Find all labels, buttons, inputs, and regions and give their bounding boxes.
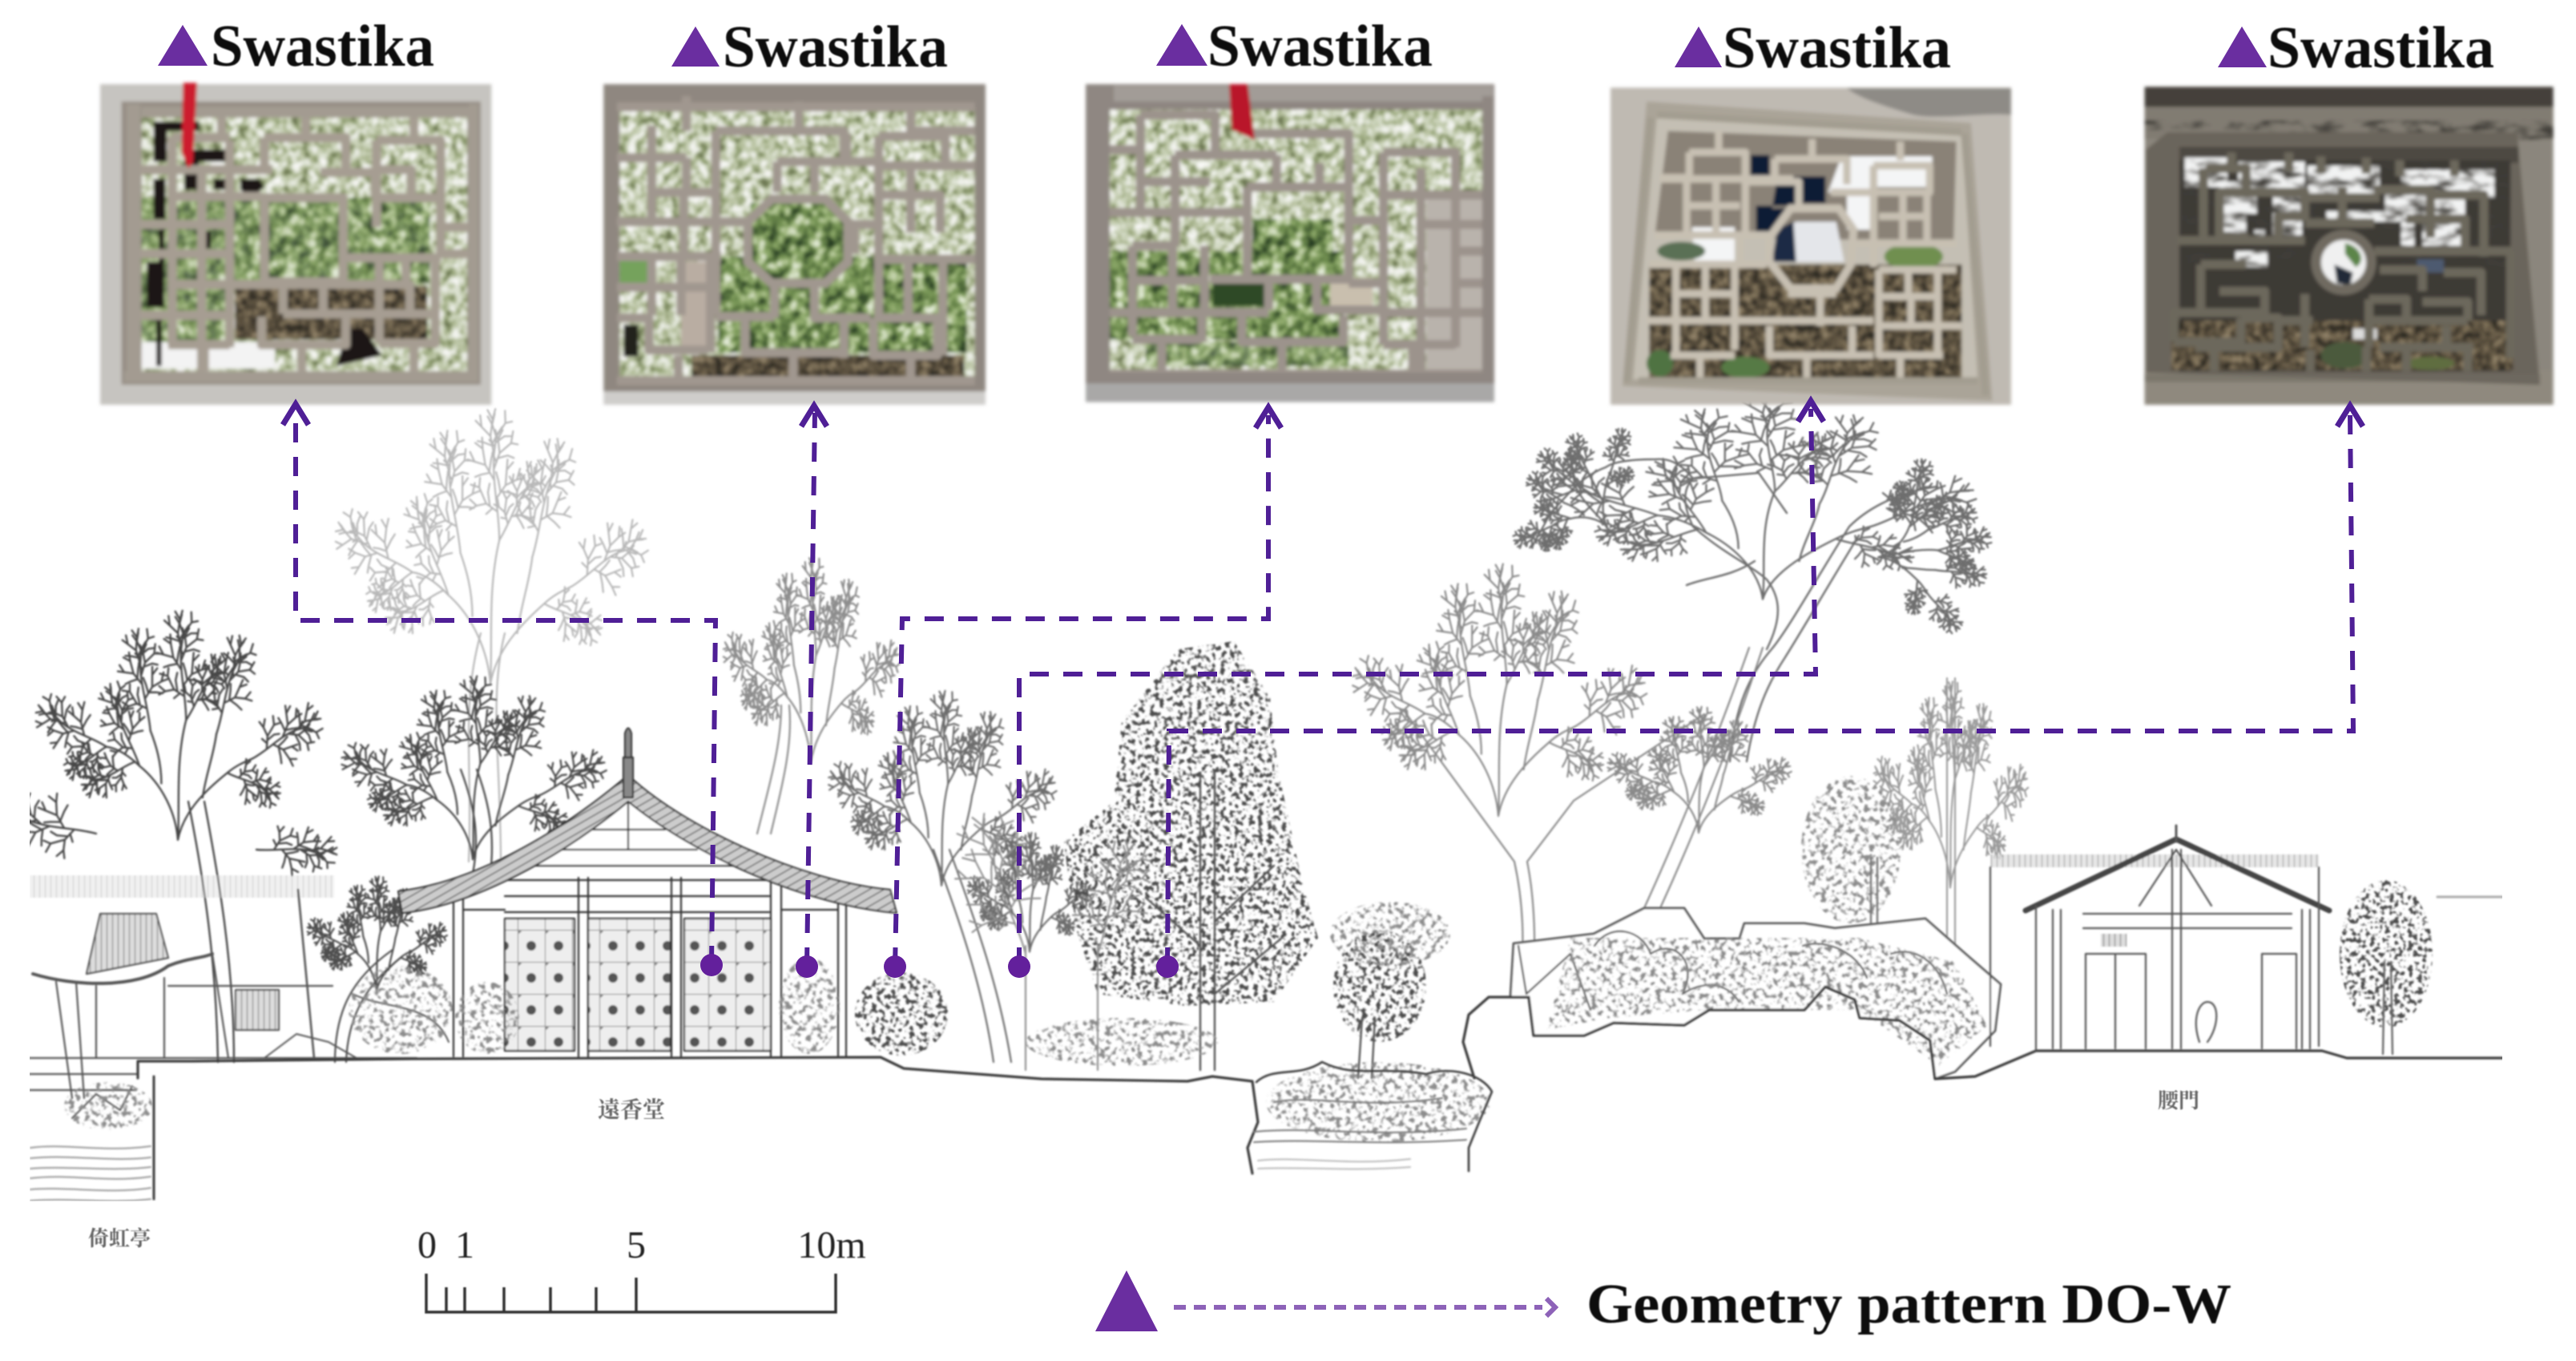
photo 1: lattice window [100, 83, 491, 405]
tree: dense conifer [1064, 641, 1318, 1070]
window 2 view [619, 107, 975, 379]
photo 5: dark lattice window [2145, 87, 2554, 405]
tree: faint tree above hall right [716, 550, 907, 834]
gate roof [2026, 839, 2329, 911]
scale label 5: 5 [627, 1224, 646, 1266]
window 3 view [1100, 110, 1485, 377]
window 4 wall stains [1847, 88, 2011, 117]
window 5 medallion [2316, 235, 2371, 290]
legend triangle [1095, 1270, 1158, 1331]
shrub: tree behind rockery [1800, 775, 1901, 925]
tree: small dark tree left of hall [301, 872, 453, 1062]
window 4 view [1647, 131, 1961, 379]
photo 4: weathered lattice window [1611, 87, 2011, 405]
hall: Yuanxiang Hall [398, 728, 897, 1056]
section drawing: garden elevation [0, 386, 2502, 1201]
window 5 view [2171, 158, 2514, 371]
window 1 lattice [136, 112, 469, 374]
window 3 frame [1086, 84, 1494, 383]
title 5: triangle and Swastika label: Swastika [2268, 15, 2494, 81]
window 5 frame [2146, 132, 2540, 385]
tree: thin trees near conifer [953, 810, 1152, 1072]
shrubs beside hall [349, 958, 1490, 1142]
caption: Yihong Pavilion: 倚虹亭 [88, 1227, 151, 1250]
window 2 lattice [617, 96, 975, 382]
connector 2: dot to second window [796, 406, 827, 978]
window 5 wall band [2145, 87, 2554, 108]
pond water lines left [30, 1146, 151, 1201]
window 4 lattice [1647, 131, 1961, 382]
hall roof [398, 775, 897, 913]
legend label: Geometry pattern DO-W [1586, 1274, 2231, 1335]
window 4 frame [1623, 102, 1993, 401]
window 3 red ribbon [1229, 84, 1255, 140]
tree: slender tree right of rocks [1872, 676, 2030, 944]
hall walls and lattice doors [454, 878, 846, 1056]
hall finial [623, 728, 633, 798]
shrub: bush beside pond [1330, 902, 1450, 1078]
tree: left fork of central tree [1351, 563, 1793, 943]
tree: large left tree [0, 603, 340, 1062]
ground line and terraces [138, 897, 2502, 1199]
window 5 lattice [2174, 152, 2514, 371]
window 3 lattice [1098, 115, 1488, 374]
title 2: triangle and Swastika label: Swastika [723, 14, 948, 80]
tree: dark tree behind hall roof [330, 670, 616, 874]
window 1 view [142, 115, 467, 371]
hall gable [513, 790, 745, 866]
scale label 1: 1 [455, 1224, 474, 1266]
scale label 10m: 10m [797, 1224, 866, 1266]
legend [1095, 1270, 2231, 1335]
photo 2: lattice window with octagon [603, 84, 986, 405]
tree: tall faint tree behind hall [322, 399, 660, 862]
title 3: triangle and Swastika label: Swastika [1207, 14, 1433, 79]
left pavilion and wall [30, 875, 449, 1130]
gate building [1990, 826, 2329, 1050]
gate structure [1990, 850, 2319, 1050]
caption: Waist Gate: 腰門 [2158, 1089, 2199, 1113]
connector 5: dot to fifth window [1156, 406, 2363, 978]
connector 3: dot to third window [884, 407, 1281, 978]
title 1: triangle and Swastika label: Swastika [211, 14, 434, 79]
scale label 0: 0 [417, 1224, 437, 1266]
rockery outlines [1510, 908, 2001, 1079]
window 1 red ribbon [182, 83, 197, 168]
legend dashed arrow [1174, 1298, 1555, 1316]
caption: Yuanxiang Hall: 遠香堂 [598, 1096, 665, 1123]
connector 1: dot to first window [283, 404, 723, 976]
tree: big central tree crown [1511, 402, 1993, 763]
scale bar [417, 1224, 866, 1312]
window 2 octagon [748, 199, 848, 283]
gate wall band [1990, 854, 2319, 867]
tree: tree right of hall [819, 684, 1098, 1062]
connector 4: dot to fourth window [1008, 401, 1824, 978]
window 4 octagon [1769, 208, 1853, 289]
photo 3: lattice window with ribbon [1086, 84, 1494, 402]
window 1 frame [122, 102, 481, 385]
title 4: triangle and Swastika label: Swastika [1723, 15, 1951, 81]
shrub: small tree at right edge [2340, 880, 2433, 1054]
window 2 frame [603, 84, 986, 391]
